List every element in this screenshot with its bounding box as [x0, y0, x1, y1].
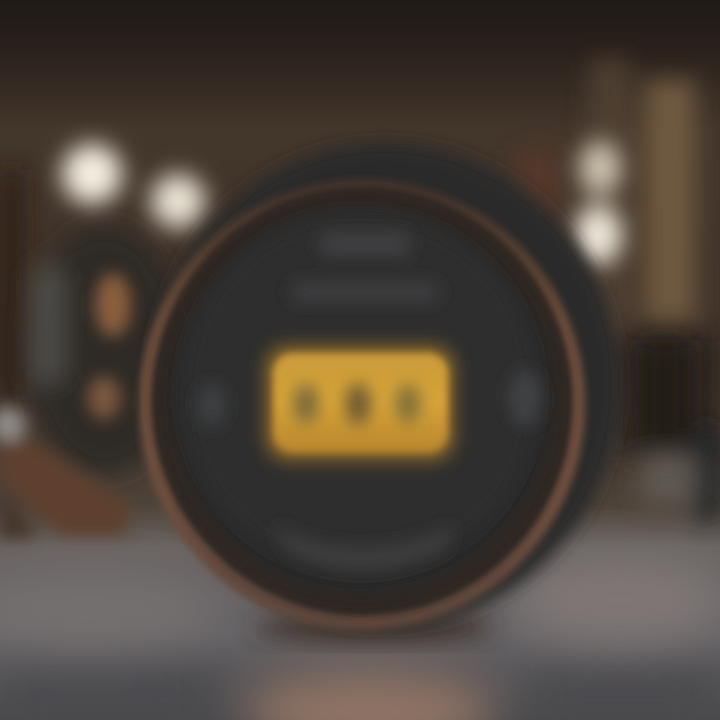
dial: brown outer ring — [147, 188, 577, 622]
icon: orange patches on left wheel — [87, 273, 131, 420]
dial: blurred face markings — [198, 232, 541, 570]
dial: dark back body — [150, 143, 620, 627]
panel: yellow face — [273, 353, 448, 453]
lights: left and right bokeh — [62, 141, 622, 265]
dial: inner face — [182, 212, 538, 572]
floor: lit patches — [0, 555, 720, 720]
wall: right tan columns — [0, 60, 720, 460]
dial: yellow panel — [264, 344, 456, 462]
dial: shadow on floor — [255, 614, 495, 642]
right: dark object — [640, 340, 720, 520]
panel: glow — [264, 344, 456, 462]
panel: three blurred digits — [293, 383, 421, 425]
dial: inner dark gap — [162, 196, 562, 604]
dial — [147, 143, 620, 642]
background wheel: left — [25, 225, 185, 475]
wooden steps: bottom left — [0, 407, 130, 540]
